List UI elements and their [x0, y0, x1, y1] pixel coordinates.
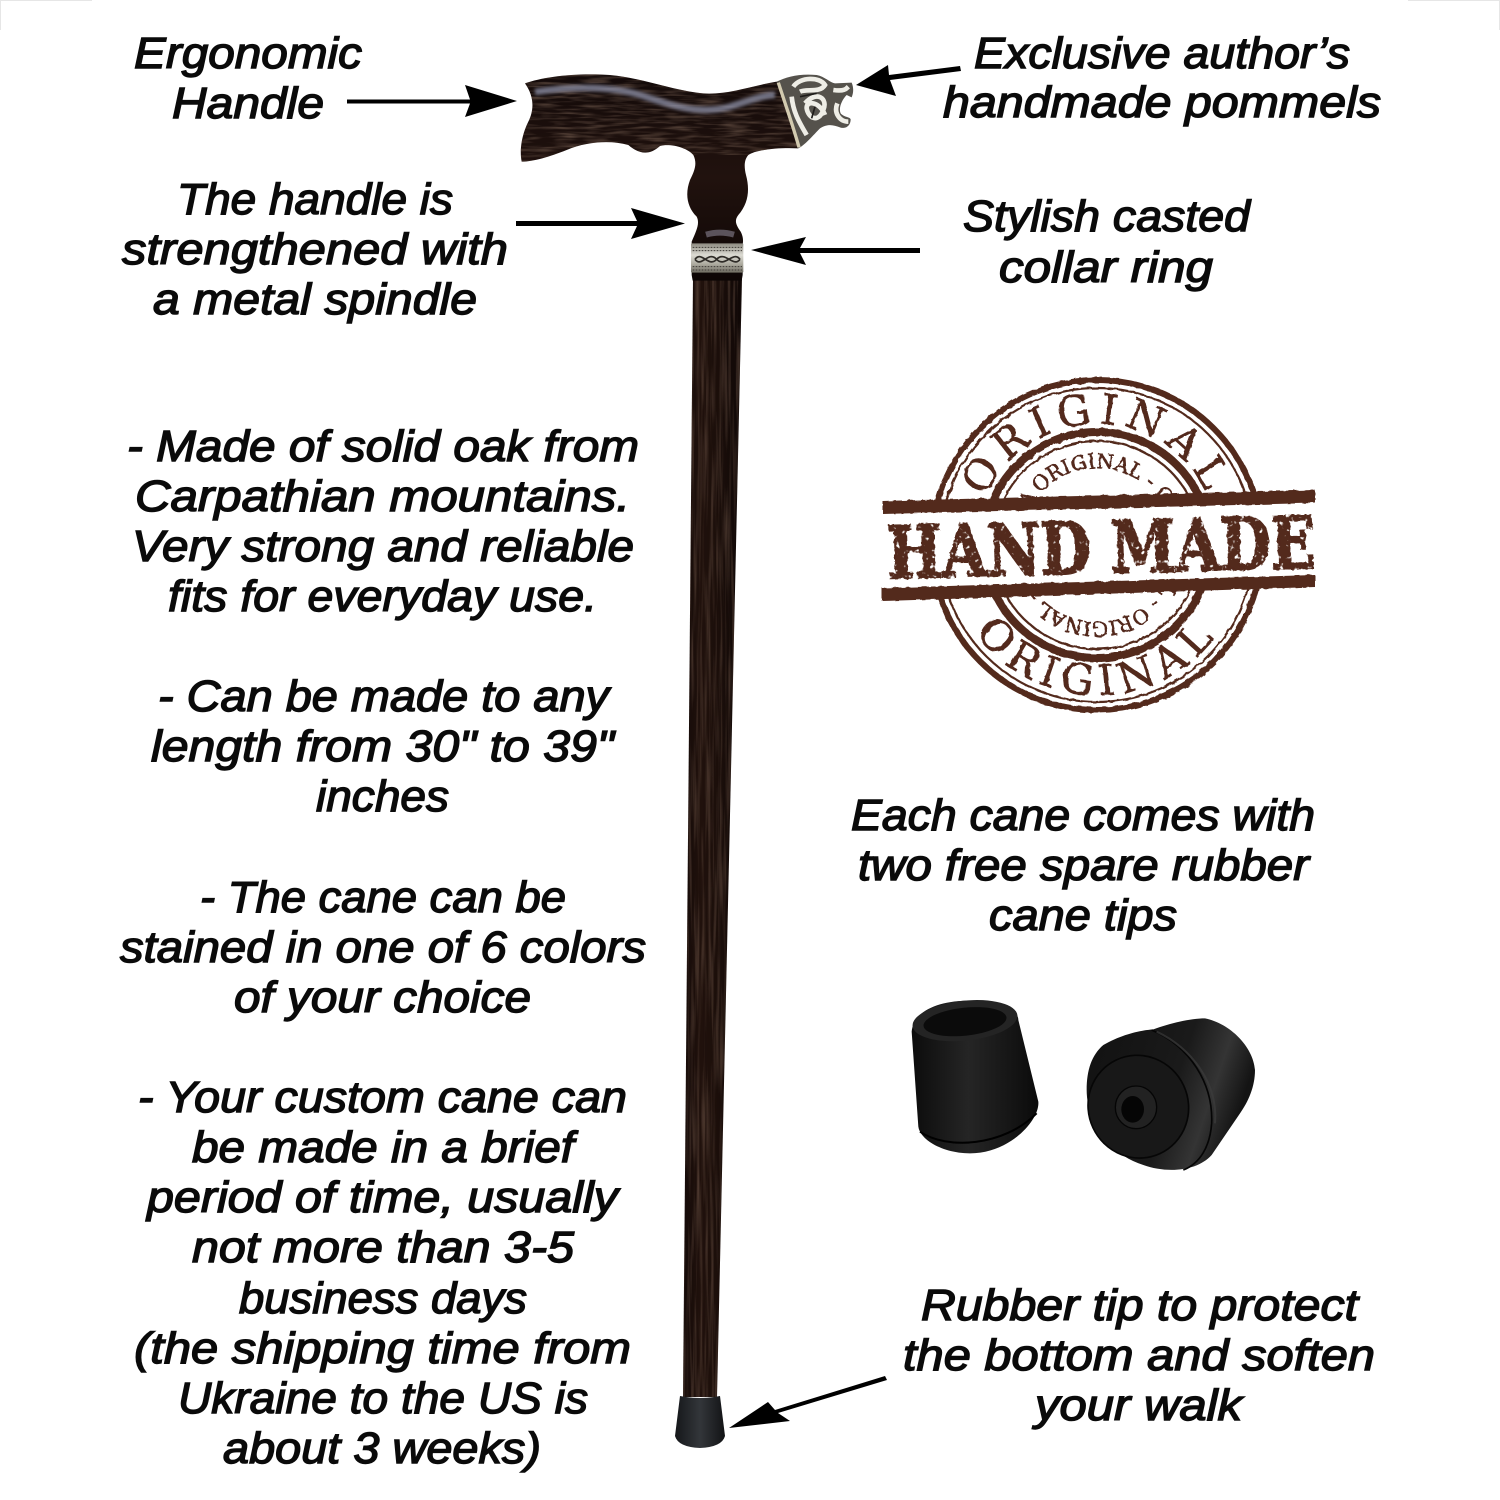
text block: spare tips: two free spare rubber: [858, 841, 1312, 890]
text block: features: business days: [239, 1274, 527, 1323]
arrow: collar: [751, 237, 920, 265]
label: rubber tip: [903, 1281, 1375, 1430]
text block: features: length from 30" to 39": [151, 722, 617, 771]
label: exclusive pommels: Exclusive author’s: [974, 29, 1350, 78]
pommel: [777, 75, 853, 148]
text block: features: fits for everyday use.: [168, 572, 597, 621]
text block: features: of your choice: [234, 973, 531, 1022]
label: collar ring: collar ring: [999, 243, 1214, 292]
text block: features: be made in a brief: [192, 1123, 579, 1172]
text block: spare tips: cane tips: [989, 891, 1177, 940]
text block: features: Very strong and reliable: [132, 522, 634, 571]
text block: features: - Made of solid oak from: [127, 422, 639, 471]
page edge tint: [0, 0, 1500, 30]
text block: features: - Can be made to any: [158, 672, 612, 721]
label: rubber tip: Rubber tip to protect: [921, 1281, 1360, 1330]
text block: features: - The cane can be: [200, 873, 566, 922]
cane shaft: [683, 278, 742, 1397]
collar ring: [691, 243, 743, 273]
label: metal spindle: [122, 175, 508, 324]
spare rubber tips: [911, 995, 1255, 1175]
stamp: hand made original: [882, 376, 1316, 714]
text block: features: Ukraine to the US is: [178, 1374, 588, 1423]
label: ergonomic handle: Ergonomic: [134, 29, 362, 78]
label: rubber tip: the bottom and soften: [903, 1331, 1375, 1380]
arrow: handle: [347, 85, 517, 117]
stamp rings and circular text: [935, 376, 1260, 714]
text block: features: inches: [316, 772, 449, 821]
cane rubber tip: [675, 1396, 725, 1448]
text block: features: - Your custom cane can: [138, 1073, 627, 1122]
label: rubber tip: your walk: [1032, 1381, 1244, 1430]
text block: features: stained in one of 6 colors: [120, 923, 646, 972]
label: metal spindle: strengthened with: [122, 225, 508, 274]
label: collar ring: [963, 192, 1252, 292]
arrow: spindle: [516, 208, 685, 239]
tip: open end up: [911, 995, 1038, 1153]
arrow: pommel: [856, 65, 961, 96]
label: exclusive pommels: handmade pommels: [943, 78, 1381, 127]
text block: features: not more than 3-5: [192, 1223, 575, 1272]
label: ergonomic handle: [134, 29, 362, 128]
tip: closed end facing: [1071, 1018, 1255, 1175]
arrow: rubber tip: [729, 1376, 887, 1428]
label: exclusive pommels: [943, 29, 1381, 127]
text block: features: Carpathian mountains.: [135, 472, 630, 521]
label: ergonomic handle: Handle: [172, 79, 324, 128]
label: metal spindle: The handle is: [177, 175, 453, 224]
stamp rings and circular text: ORIGINAL: [981, 619, 1214, 696]
neck highlight: [706, 233, 734, 235]
cane: [521, 74, 853, 1448]
label: metal spindle: a metal spindle: [153, 275, 477, 324]
label: collar ring: Stylish casted: [963, 192, 1252, 241]
stamp banner: HAND MADE: [886, 500, 1316, 595]
text block: features: [120, 422, 646, 1473]
highlight on handle: [535, 88, 775, 110]
text block: features: period of time, usually: [145, 1173, 621, 1222]
text block: features: (the shipping time from: [134, 1324, 631, 1373]
text block: spare tips: Each cane comes with: [851, 791, 1315, 840]
cane handle: [521, 74, 853, 281]
text block: spare tips: [851, 791, 1315, 940]
text block: features: about 3 weeks): [223, 1424, 541, 1473]
stamp rings and circular text: ORIGINAL: [964, 392, 1226, 491]
